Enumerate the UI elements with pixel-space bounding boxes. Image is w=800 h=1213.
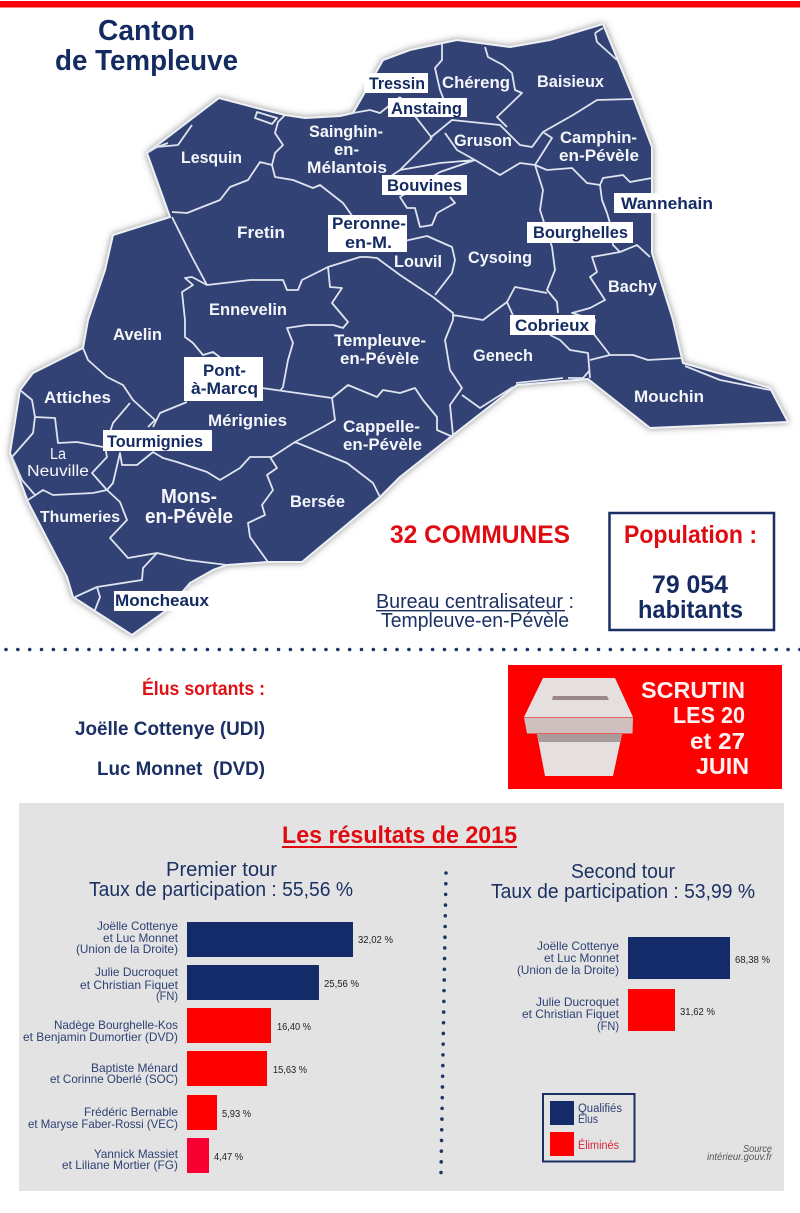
tag: Pont-à-Marcq	[184, 357, 263, 401]
bar chart: second round	[517, 937, 770, 1033]
tag: Anstaing: Anstaing	[391, 99, 462, 118]
bar row: Ménard / Oberlé: 15,63 %	[273, 1065, 307, 1076]
bar row: Ducroquet / Fiquet: 31,62 %	[680, 1007, 715, 1018]
label: Cappelle-en-Pévèle: Cappelle-	[343, 417, 420, 436]
source	[707, 1144, 773, 1163]
tag: Bouvines: Bouvines	[387, 176, 462, 195]
bar row: Bernable / Faber-Rossi: 5,93 %	[222, 1109, 251, 1120]
bar row: Bourghelle-Kos / Dumortier: 16,40 %	[277, 1022, 311, 1033]
bar row: Bernable / Faber-Rossi: Frédéric Bernable	[84, 1105, 178, 1119]
bar row: Cottenye / Monnet	[517, 937, 770, 979]
map outline	[10, 24, 788, 635]
legend: Élus	[578, 1113, 598, 1126]
top red bar	[0, 1, 800, 8]
label: Templeuve-en-Pévèle	[334, 331, 426, 368]
bar row: Ménard / Oberlé	[50, 1051, 307, 1086]
label: Mouchin: Mouchin	[634, 387, 704, 406]
label: Genech: Genech	[473, 346, 533, 365]
tag: Pont-à-Marcq: Pont-	[203, 361, 246, 380]
title: de Templeuve	[55, 45, 238, 77]
label: Camphin-en-Pévèle: Camphin-	[560, 128, 637, 147]
results heading: Les résultats de 2015	[282, 822, 517, 849]
label: Attiches: Attiches	[44, 388, 111, 407]
tag: Peronne-en-M.	[328, 214, 407, 252]
legend: Éliminés	[578, 1139, 619, 1152]
tag: Pont-à-Marcq: à-Marcq	[191, 379, 258, 398]
population box: habitants	[638, 596, 743, 624]
label: Cappelle-en-Pévèle	[343, 417, 422, 454]
bar row: Ménard / Oberlé: Baptiste Ménard	[91, 1061, 178, 1075]
label: Gruson: Gruson	[454, 131, 512, 150]
label: La Neuville: Neuville	[27, 463, 89, 480]
label: Bachy: Bachy	[608, 277, 658, 296]
label: Avelin: Avelin	[113, 325, 162, 344]
label: Lesquin: Lesquin	[181, 148, 242, 167]
outgoing councillors	[75, 678, 265, 780]
title: Canton	[98, 15, 195, 47]
population box: Population :	[624, 521, 757, 549]
label: Sainghin-en-Mélantois: Mélantois	[307, 158, 387, 177]
bar row: Bourghelle-Kos / Dumortier: et Benjamin Dumortier (DVD)	[23, 1030, 178, 1044]
label: Mons-en-Pévèle: Mons-	[161, 486, 217, 508]
bureau centralisateur	[376, 591, 574, 632]
label: Fretin: Fretin	[237, 223, 285, 242]
bar row: Bourghelle-Kos / Dumortier: Nadège Bourghelle-Kos	[54, 1018, 178, 1032]
bar row: Cottenye / Monnet: 32,02 %	[358, 935, 393, 946]
bureau centralisateur: Templeuve-en-Pévèle	[381, 610, 569, 632]
bar row: Massiet / Mortier: et Liliane Mortier (FG)	[62, 1158, 178, 1172]
first round heading	[89, 859, 353, 901]
bar row: Cottenye / Monnet: Joëlle Cottenye	[97, 919, 178, 933]
label: La Neuville: La	[50, 446, 66, 463]
bar row: Bernable / Faber-Rossi	[28, 1095, 251, 1131]
tag: Bourghelles: Bourghelles	[533, 223, 628, 242]
bar row: Cottenye / Monnet: 68,38 %	[735, 955, 770, 966]
panel: 2015 results	[19, 803, 784, 1191]
bar row: Ducroquet / Fiquet	[522, 989, 715, 1033]
bar row: Ducroquet / Fiquet: et Christian Fiquet	[522, 1007, 620, 1021]
source: intérieur.gouv.fr	[707, 1152, 773, 1163]
map: canton communes	[10, 24, 788, 635]
population box: 79 054	[652, 571, 728, 599]
legend: Qualifiés	[578, 1103, 622, 1115]
bar row: Cottenye / Monnet: (Union de la Droite)	[76, 942, 178, 956]
bar row: Ducroquet / Fiquet: (FN)	[597, 1019, 619, 1033]
first round heading: Premier tour	[166, 859, 277, 881]
bar row: Ducroquet / Fiquet: Julie Ducroquet	[95, 965, 179, 979]
bar row: Massiet / Mortier: 4,47 %	[214, 1152, 243, 1163]
bar row: Ducroquet / Fiquet	[80, 965, 359, 1003]
bar row: Ducroquet / Fiquet: Julie Ducroquet	[536, 995, 620, 1009]
label: Camphin-en-Pévèle: en-Pévèle	[559, 146, 639, 165]
bar row: Ménard / Oberlé: et Corinne Oberlé (SOC)	[50, 1072, 178, 1086]
label: Mérignies: Mérignies	[208, 411, 287, 430]
label: Chéreng: Chéreng	[442, 73, 510, 92]
population box	[610, 513, 774, 630]
tag: Tressin: Tressin	[369, 74, 425, 93]
bar row: Bourghelle-Kos / Dumortier	[23, 1008, 311, 1044]
label: Louvil: Louvil	[394, 252, 442, 271]
bar row: Cottenye / Monnet	[76, 919, 393, 957]
bar row: Bernable / Faber-Rossi: et Maryse Faber-Rossi (VEC)	[28, 1117, 178, 1131]
label: Sainghin-en-Mélantois: en-	[334, 140, 359, 159]
panel: scrutin dates	[508, 665, 782, 789]
bar row: Ducroquet / Fiquet: 25,56 %	[324, 979, 359, 990]
first round heading: Taux de participation : 55,56 %	[89, 879, 353, 901]
scrutin text: JUIN	[696, 753, 749, 779]
label: Camphin-en-Pévèle	[559, 128, 639, 165]
label: Cappelle-en-Pévèle: en-Pévèle	[343, 435, 422, 454]
scrutin text: et 27	[690, 728, 745, 754]
communes count: 32 COMMUNES	[390, 521, 570, 549]
label: Baisieux: Baisieux	[537, 72, 605, 91]
label: La Neuville	[27, 446, 89, 480]
map commune boundaries	[12, 28, 770, 610]
scrutin text: SCRUTIN	[641, 677, 745, 703]
source: Source	[743, 1144, 772, 1155]
bar row: Cottenye / Monnet: Joëlle Cottenye	[537, 939, 619, 953]
tag: Moncheaux: Moncheaux	[115, 591, 210, 610]
bureau centralisateur: Bureau centralisateur :	[376, 591, 574, 613]
label: Bersée: Bersée	[290, 492, 345, 511]
title	[55, 15, 238, 77]
bar row: Cottenye / Monnet: et Luc Monnet	[103, 931, 179, 945]
tag: Cobrieux: Cobrieux	[515, 316, 590, 335]
tag: Peronne-en-M.: en-M.	[345, 233, 392, 252]
tag: Tourmignies: Tourmignies	[107, 432, 203, 451]
outgoing councillors: Élus sortants :	[142, 678, 265, 700]
second round heading: Second tour	[571, 861, 675, 883]
bar row: Massiet / Mortier	[62, 1138, 243, 1173]
scrutin text	[641, 677, 749, 779]
outgoing councillors: Joëlle Cottenye (UDI)	[75, 719, 265, 740]
bar row: Cottenye / Monnet: et Luc Monnet	[544, 951, 620, 965]
label: Mons-en-Pévèle	[145, 486, 233, 528]
scrutin text: LES 20	[673, 702, 745, 728]
second round heading: Taux de participation : 53,99 %	[491, 881, 755, 903]
label: Templeuve-en-Pévèle: Templeuve-	[334, 331, 426, 350]
label: Templeuve-en-Pévèle: en-Pévèle	[340, 349, 419, 368]
tag: Peronne-en-M.: Peronne-	[332, 214, 406, 233]
legend	[543, 1094, 634, 1162]
label: Thumeries: Thumeries	[40, 509, 120, 526]
label: Ennevelin: Ennevelin	[209, 300, 287, 319]
label: Sainghin-en-Mélantois: Sainghin-	[309, 122, 383, 141]
second round heading	[491, 861, 755, 903]
bar row: Massiet / Mortier: Yannick Massiet	[94, 1147, 179, 1161]
outgoing councillors: Luc Monnet (DVD)	[97, 759, 265, 780]
label: Sainghin-en-Mélantois	[307, 122, 387, 177]
label: Mons-en-Pévèle: en-Pévèle	[145, 506, 233, 528]
bar row: Ducroquet / Fiquet: et Christian Fiquet	[80, 978, 179, 992]
tag: Wannehain: Wannehain	[621, 194, 713, 213]
bar row: Ducroquet / Fiquet: (FN)	[156, 989, 178, 1003]
icon: ballot box	[524, 678, 633, 776]
bar row: Cottenye / Monnet: (Union de la Droite)	[517, 963, 619, 977]
bar chart: first round	[23, 919, 393, 1173]
label: Cysoing: Cysoing	[468, 248, 532, 267]
